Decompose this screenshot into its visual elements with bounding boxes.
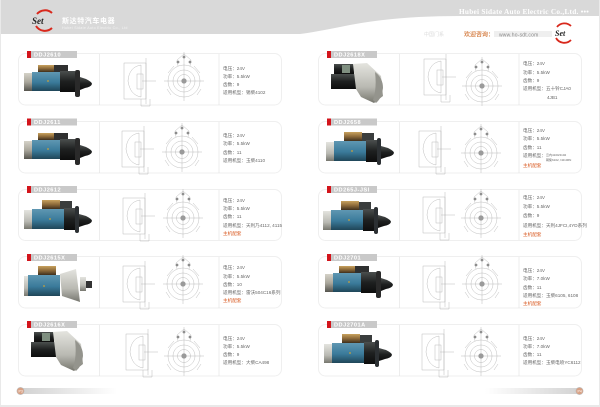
panel: DDJ2611: 适用机型：玉柴4110 <box>223 157 265 164</box>
logo right: Set <box>555 29 566 38</box>
panel: DDJ2618X: 适用机型：五十铃CJA0 <box>523 85 571 92</box>
panel: DDJ2701: 适用机型：玉柴6105, 6108 <box>523 292 579 299</box>
panel: DDJ2701: 功率：7.0kW <box>523 275 550 282</box>
panel: DDJ2701: 齿数：11 <box>523 284 542 291</box>
panel: DDJ2612: 功率：5.5kW <box>223 205 250 212</box>
panel: DDJ2701A: 功率：7.0kW <box>523 343 550 350</box>
panel: DDJ2701A: 适用机型：玉柴电喷YC6112 <box>523 359 581 366</box>
panel: DDJ2610: 适用机型：锡柴4102 <box>223 89 266 96</box>
panel: DD265JJSI: 功率：5.5kW <box>523 203 550 210</box>
panel: DDJ2615X: 功率：5.5kW <box>223 273 250 280</box>
panel: DDJ2658: 朝柴6102, N2106N <box>546 157 571 162</box>
panel: DDJ2616X <box>18 321 282 377</box>
panel: DDJ2616X: 功率：5.5kW <box>223 343 250 350</box>
panel: DDJ2658 <box>318 118 582 174</box>
panel: DDJ2658: 主机配套 <box>523 162 542 169</box>
company name right: Hubei Sidate Auto Electric Co.,Ltd. ••• <box>459 7 589 16</box>
panel: DDJ2615X: DDJ2615X <box>34 256 65 262</box>
panel: DD265JJSI: 主机配套 <box>523 231 542 238</box>
panel: DDJ2616X: DDJ2616X <box>34 322 65 328</box>
panel: DDJ2658: 适用机型： <box>523 152 546 159</box>
panel: DDJ2612: DDJ2612 <box>34 188 61 194</box>
panel: DDJ2610: 齿数：9 <box>223 81 240 88</box>
faint slogan: 中国门系 <box>424 31 444 38</box>
panel: DDJ2611: DDJ2611 <box>34 120 61 126</box>
logo left <box>32 10 52 31</box>
website line <box>464 30 552 38</box>
company name left <box>62 16 128 30</box>
panel: DDJ2612: 适用机型：天利乃4112, 4115 <box>223 222 283 229</box>
panel: DDJ2618X: 电压：24V <box>523 60 546 67</box>
panel: DDJ2615X: 主机配套 <box>223 297 242 304</box>
panel: DD265JJSI <box>318 186 587 240</box>
panel: DDJ2618X: 齿数：9 <box>523 77 540 84</box>
panel: DDJ2612: 电压：24V <box>223 197 246 204</box>
panel: DDJ2701A: 电压：24V <box>523 335 546 342</box>
panel: DDJ2615X: 适用机型：雷沃504C16系列 <box>223 289 281 296</box>
panel: DDJ2611: 齿数：11 <box>223 149 242 156</box>
panel: DDJ2701A <box>318 321 582 377</box>
panel: DDJ2616X: 适用机型：大柴CA498 <box>223 359 270 366</box>
panel: DDJ2618X <box>318 51 582 106</box>
panel: DDJ2701A: DDJ2701A <box>334 322 366 328</box>
panel: DD265JJSI: 齿数：9 <box>523 212 540 219</box>
panel: DDJ2701: 电压：24V <box>523 267 546 274</box>
panel: DDJ2658: 电压：24V <box>523 127 546 134</box>
panel: DDJ2701: DDJ2701 <box>334 256 361 262</box>
website line: 欢迎咨询： <box>464 30 494 38</box>
panel: DDJ2611: 电压：24V <box>223 132 246 139</box>
panel: DDJ2618X: DDJ2618X <box>334 52 365 58</box>
panel: DDJ2615X: 电压：24V <box>223 264 246 271</box>
panel: DDJ2610 <box>18 51 282 106</box>
panel: DDJ2610: DDJ2610 <box>34 52 61 58</box>
website line: www.ho-sdt.com <box>499 32 538 38</box>
panel: DDJ2616X: 电压：24V <box>223 335 246 342</box>
panel: DDJ2612: 主机配套 <box>223 230 242 237</box>
panel: DDJ2615X <box>18 254 282 309</box>
logo left: Set <box>32 16 44 26</box>
panel: DD265JJSI: 适用机型：天利4JFCI,4YD系列 <box>523 222 587 229</box>
panel: DDJ2658: 云内4100/4102 <box>546 152 567 157</box>
company name left: Hubei Sidate Auto Electric Co., Ltd <box>62 26 128 30</box>
panel: DDJ2658: DDJ2658 <box>334 120 361 126</box>
panel: DDJ2618X: 4JB1 <box>547 95 558 100</box>
header band right <box>300 0 599 34</box>
page number left: P3 <box>18 390 23 394</box>
panel: DDJ2611 <box>18 118 282 174</box>
panel: DDJ2615X: 齿数：10 <box>223 281 242 288</box>
page number right <box>485 387 583 395</box>
panel: DDJ2611: 功率：5.5kW <box>223 140 250 147</box>
panel: DDJ2701: 主机配套 <box>523 300 542 307</box>
page number right: P4 <box>578 390 582 394</box>
company name left: 斯达特汽车电器 <box>62 16 115 25</box>
panel: DD265JJSI: 电压：24V <box>523 194 546 201</box>
panel: DDJ2616X: 齿数：9 <box>223 351 240 358</box>
panel: DD265JJSI: DD265J-JSI <box>334 188 370 194</box>
panel: DDJ2610: 电压：24V <box>223 65 246 72</box>
panel: DDJ2610: 功率：5.5kW <box>223 73 250 80</box>
panel: DDJ2701 <box>318 254 582 309</box>
panel: DDJ2618X: 功率：5.5kW <box>523 69 550 76</box>
panel: DDJ2701A: 齿数：11 <box>523 351 542 358</box>
logo right <box>555 23 571 43</box>
panel: DDJ2658: 功率：5.5kW <box>523 135 550 142</box>
panel: DDJ2658: 齿数：11 <box>523 144 542 151</box>
panel: DDJ2612: 齿数：11 <box>223 213 242 220</box>
page number left <box>17 387 117 395</box>
panel: DDJ2612 <box>18 186 283 241</box>
header band left <box>1 0 300 34</box>
